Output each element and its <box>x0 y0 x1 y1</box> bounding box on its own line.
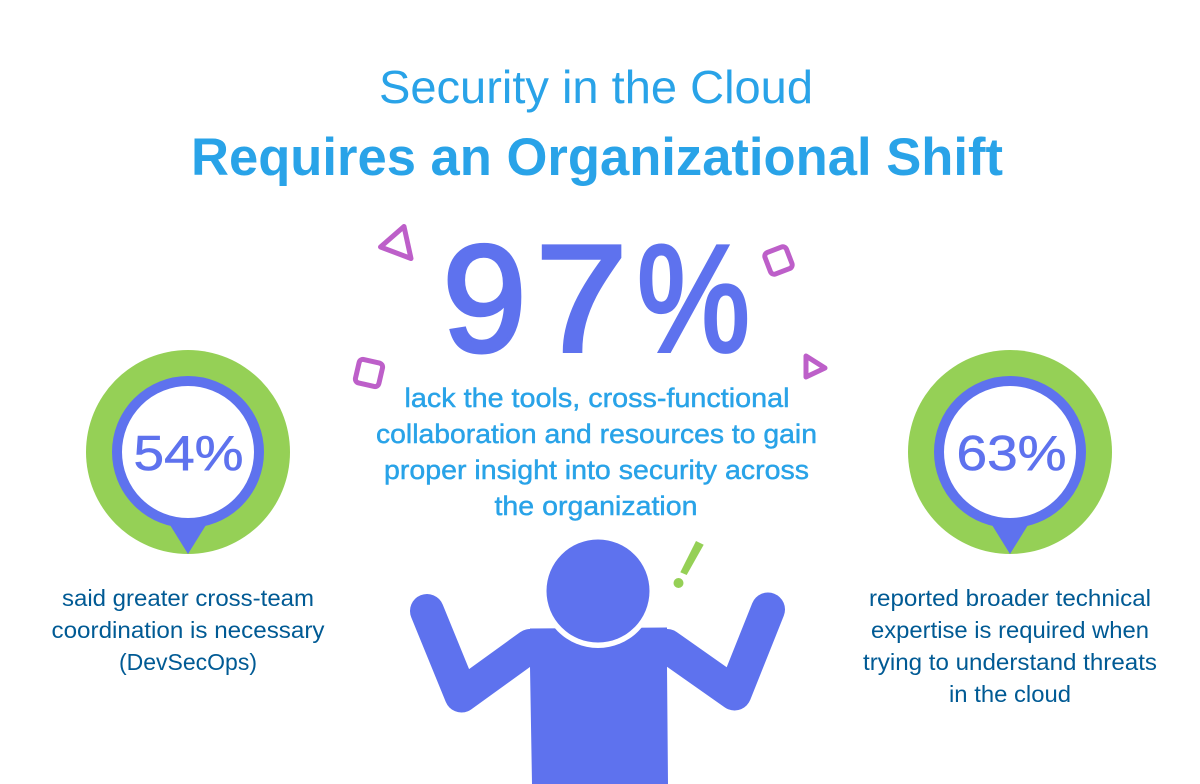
title <box>191 61 1003 187</box>
big statistic: 97% <box>442 214 750 384</box>
badge: 54% <box>86 350 290 554</box>
caption: 54% <box>52 585 325 675</box>
big statistic: 97%: 7 <box>536 214 628 384</box>
title: Security in the Cloud <box>379 61 813 113</box>
badge: 63%: 63% <box>956 427 1066 481</box>
caption: 63%: trying to understand threats <box>863 649 1157 675</box>
big statistic: 97%: % <box>637 214 750 384</box>
caption: 63%: reported broader technical <box>869 585 1151 611</box>
main statement: collaboration and resources to gain <box>376 419 817 449</box>
icon: exclamation mark <box>674 541 704 588</box>
main statement: lack the tools, cross-functional <box>404 383 790 413</box>
icon: decorative shapes <box>355 226 825 387</box>
title: Requires an Organizational Shift <box>191 128 1003 187</box>
caption: 54%: coordination is necessary <box>52 617 325 643</box>
caption: 54%: (DevSecOps) <box>119 649 257 675</box>
caption: 63% <box>863 585 1157 707</box>
big statistic: 97%: 9 <box>442 214 526 384</box>
caption: 54%: said greater cross-team <box>62 585 314 611</box>
caption: 63%: expertise is required when <box>871 617 1149 643</box>
main statement: the organization <box>494 491 698 521</box>
main statement <box>376 383 817 521</box>
icon: shrugging person <box>427 534 768 784</box>
badge: 54%: 54% <box>134 427 244 481</box>
badge: 63% <box>908 350 1112 554</box>
main statement: proper insight into security across <box>384 455 809 485</box>
caption: 63%: in the cloud <box>949 681 1071 707</box>
